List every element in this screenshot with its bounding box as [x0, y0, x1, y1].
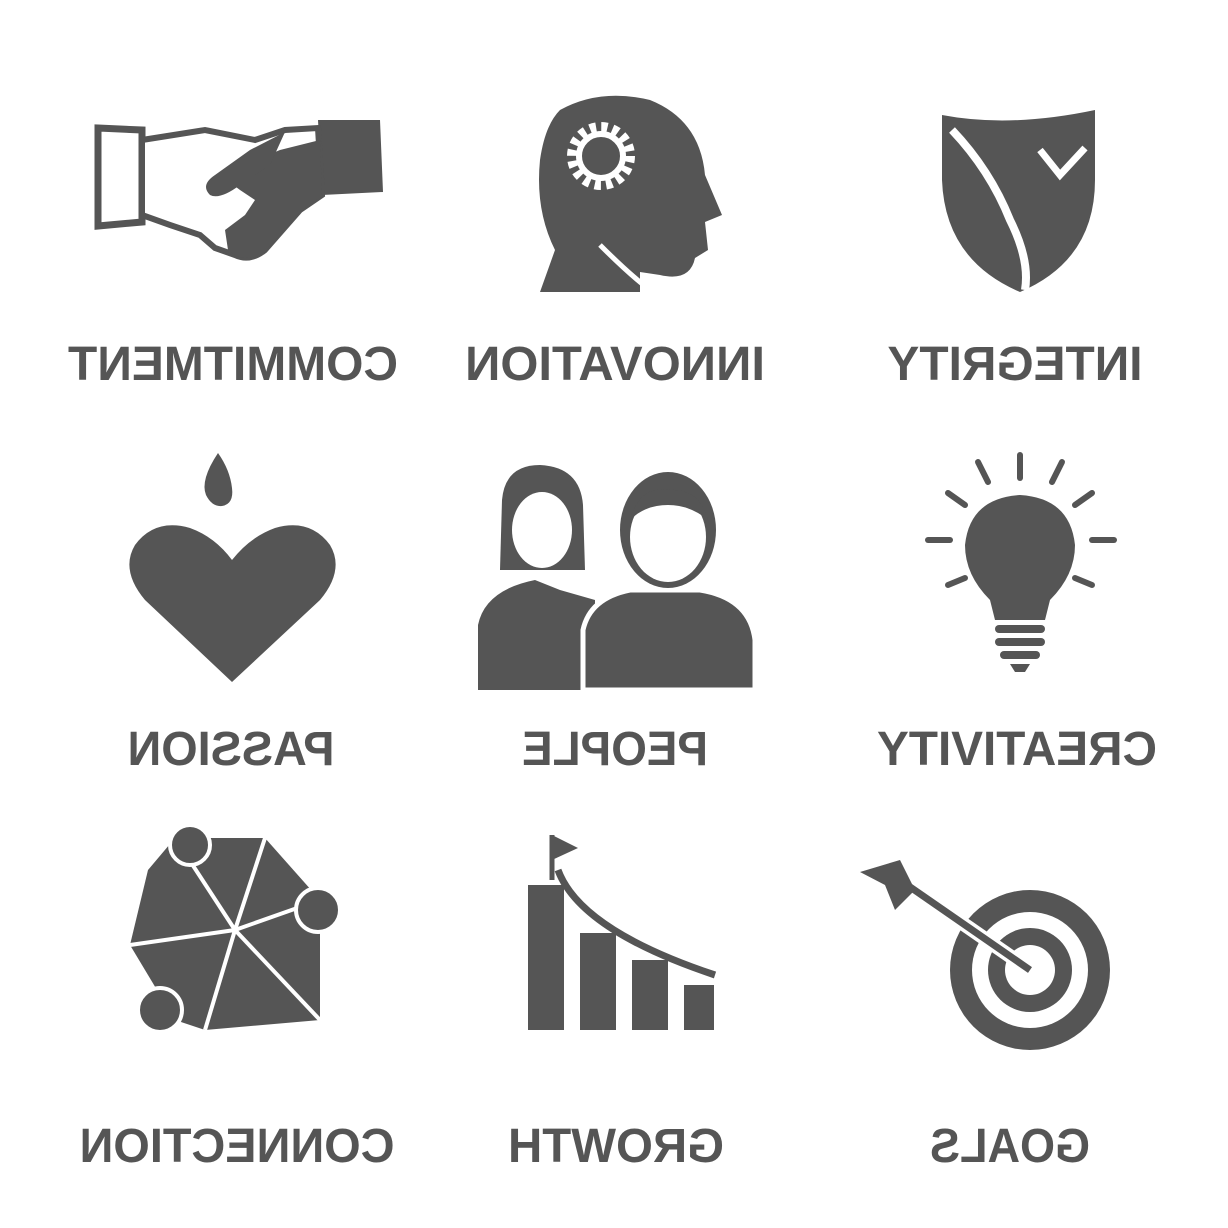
label: commitment: COMMITMENT: [68, 338, 398, 391]
label: innovation: INNOVATION: [465, 338, 765, 391]
label: growth: GROWTH: [508, 1120, 724, 1173]
icon: head with gear: [539, 96, 722, 292]
icon: shield: [942, 110, 1095, 292]
icon: light bulb: [928, 455, 1114, 672]
label: people: PEOPLE: [522, 723, 708, 776]
icon: handshake: [98, 120, 383, 258]
label: connection: CONNECTION: [80, 1120, 394, 1173]
icon: target: [860, 860, 1110, 1050]
label: integrity: INTEGRITY: [888, 338, 1142, 391]
icon: heart with flame: [129, 453, 336, 682]
icon: connection: [130, 825, 340, 1032]
label: creativity: CREATIVITY: [877, 723, 1157, 776]
label: passion: PASSION: [128, 723, 334, 776]
icon: people: [478, 465, 755, 690]
icon: growth chart: [528, 835, 715, 1030]
label: goals: GOALS: [930, 1120, 1090, 1173]
